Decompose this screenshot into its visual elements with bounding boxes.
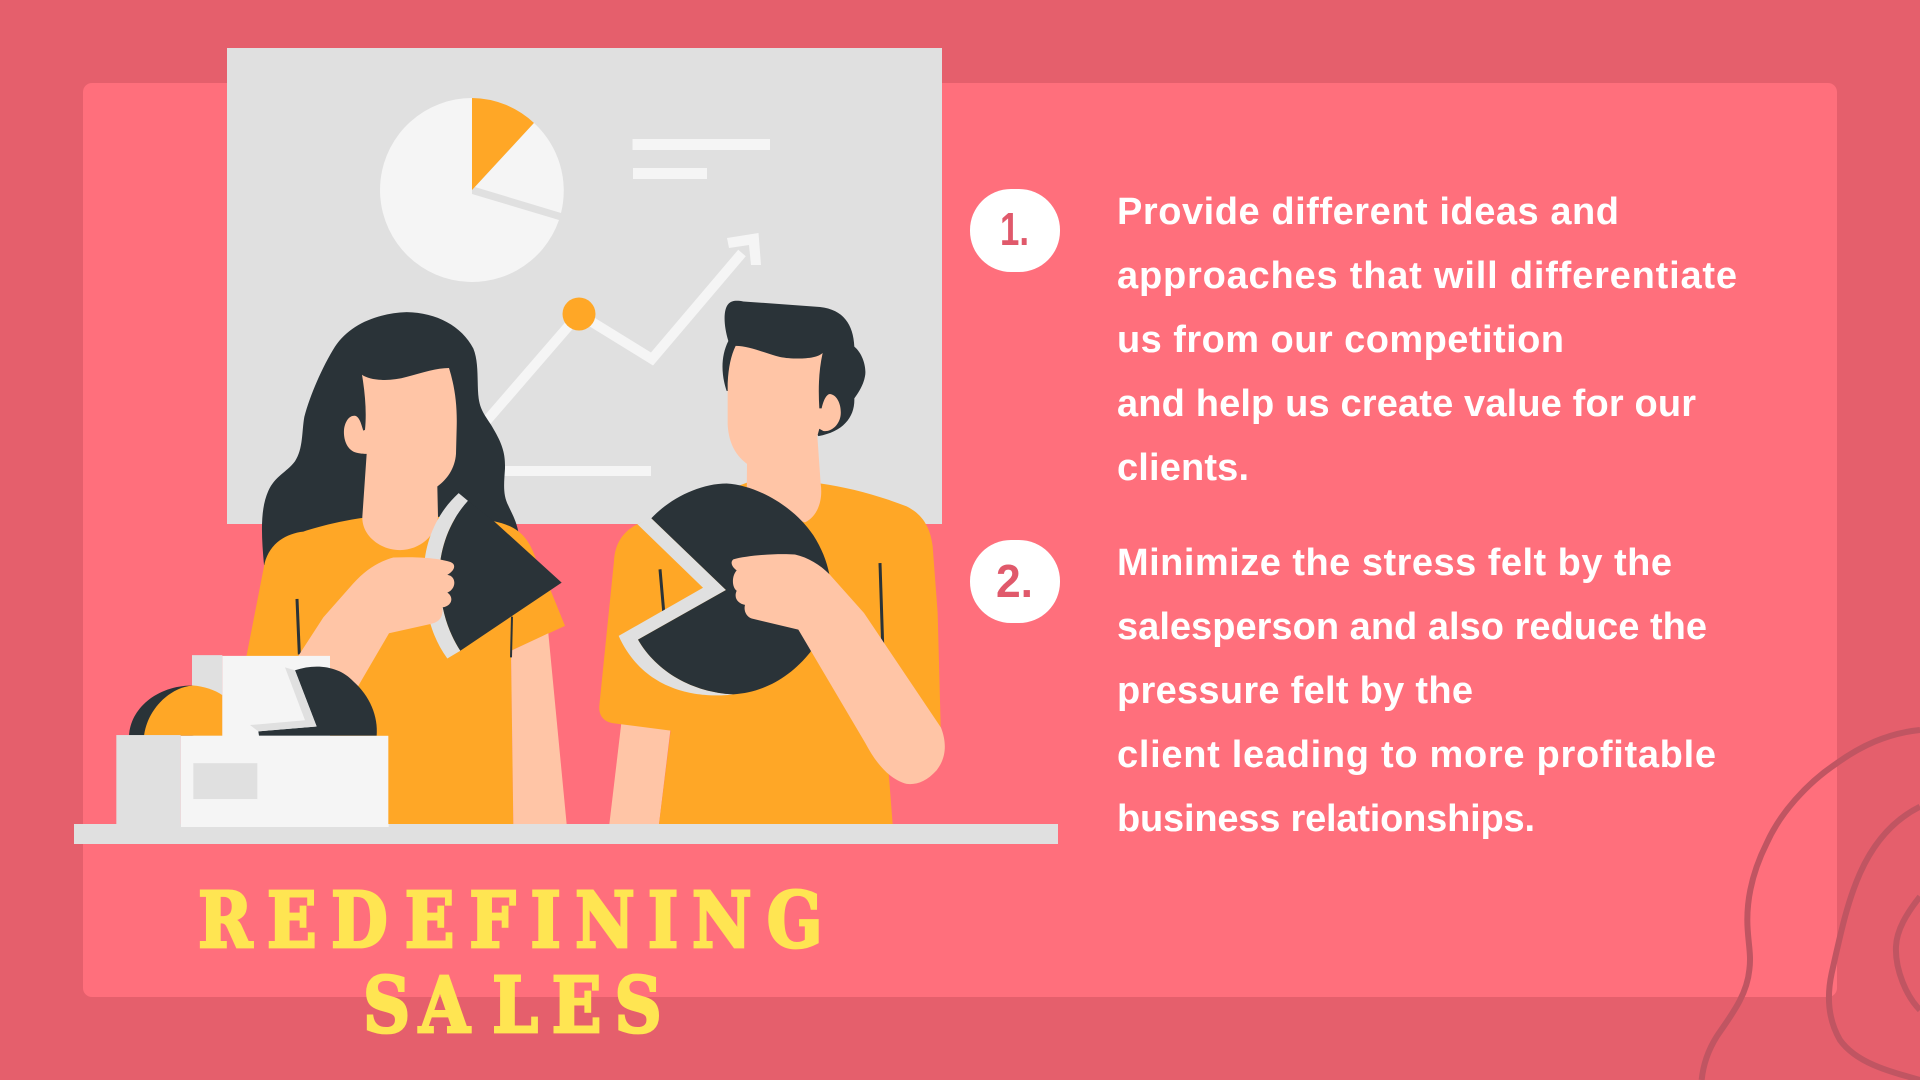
badge 2: 2. (996, 555, 1033, 607)
item 1 text: and help us create value for our (1117, 383, 1696, 425)
man arm and hand (732, 554, 945, 784)
woman shirt (243, 517, 565, 824)
woman collar lines (297, 599, 299, 654)
woman arm and hand (277, 557, 454, 694)
item 2 text (1117, 542, 1716, 840)
title (198, 875, 823, 1050)
title: REDEFINING (198, 875, 823, 965)
badge 2 (970, 540, 1060, 623)
board line chart (470, 233, 761, 440)
man left arm (609, 720, 671, 824)
paper stack with mini pies (129, 655, 377, 737)
man pie (619, 483, 829, 695)
item 2 text: salesperson and also reduce the (1117, 606, 1707, 648)
man collar lines (660, 563, 883, 644)
item 2 text: Minimize the stress felt by the (1117, 542, 1672, 584)
man figure (599, 301, 945, 824)
item 2 text: client leading to more profitable (1117, 734, 1716, 776)
item 1 text: approaches that will differentiate (1117, 255, 1737, 297)
inner panel (83, 83, 1837, 997)
man hair (722, 301, 865, 436)
badge 1: 1. (1000, 203, 1029, 255)
item 1 text (1117, 191, 1737, 489)
woman hair (262, 312, 518, 583)
box (116, 735, 388, 826)
woman face and neck (344, 368, 457, 550)
box front overlap (181, 824, 389, 827)
item 1 text: clients. (1117, 447, 1249, 489)
item 1 text: Provide different ideas and (1117, 191, 1619, 233)
woman figure (116, 312, 567, 826)
woman pie piece (424, 493, 562, 658)
item 2 text: pressure felt by the (1117, 670, 1473, 712)
man shirt (599, 483, 941, 824)
title: SALES (363, 960, 662, 1050)
item 1 text: us from our competition (1117, 319, 1564, 361)
woman forearm (511, 633, 567, 824)
item 2 text: business relationships. (1117, 798, 1535, 840)
man face and neck (728, 346, 841, 522)
decorative curves (1702, 730, 1920, 1080)
presentation board (227, 48, 942, 524)
board text bars (480, 139, 770, 476)
table (74, 824, 1058, 844)
badge 1 (970, 189, 1060, 272)
board pie chart (380, 98, 564, 282)
